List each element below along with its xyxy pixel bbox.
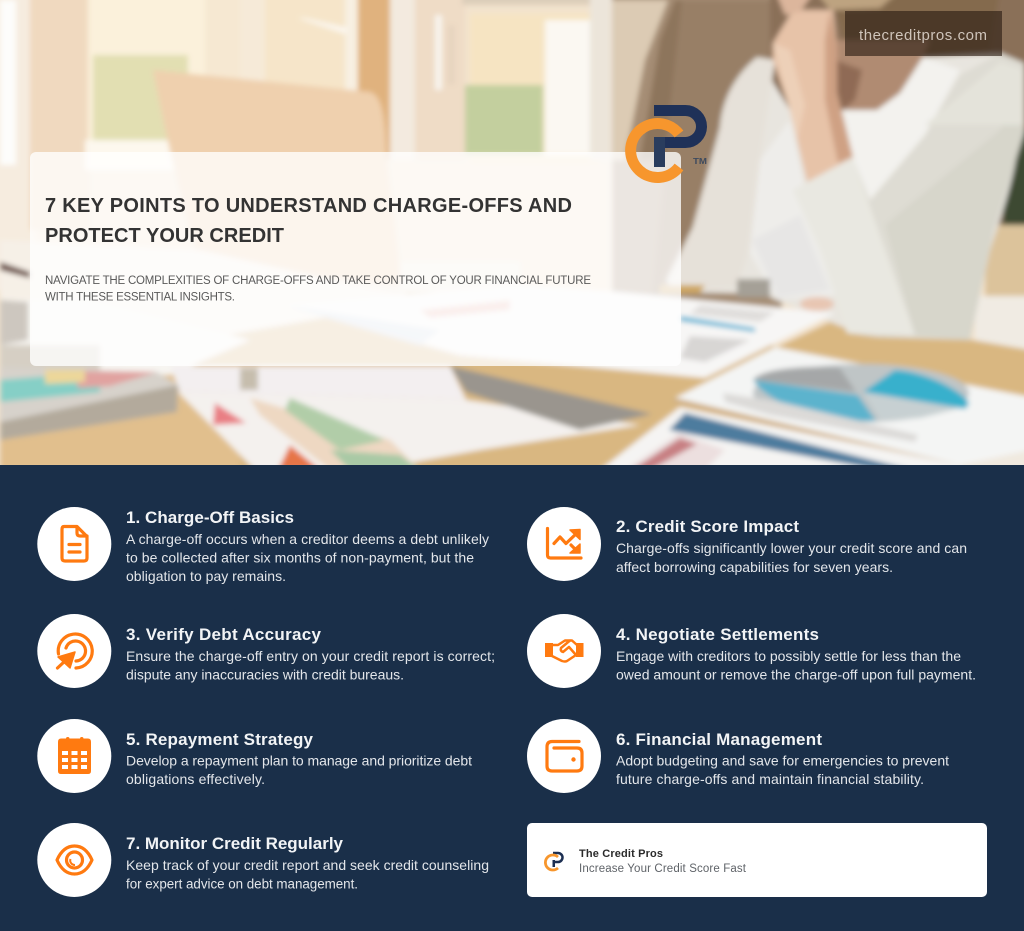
text: negotiate settlements: owed amount or remove the charge-off upon full payment.: [616, 666, 976, 682]
calculator: [0, 368, 177, 424]
text: charge-off basics: obligation to pay remains.: [126, 568, 286, 584]
text: verify debt accuracy: dispute any inaccuracies with credit bureaus.: [126, 666, 404, 682]
brand card: [527, 823, 987, 897]
item 1: charge-off basics: [37, 507, 489, 584]
text: credit score impact: [616, 517, 967, 575]
item 2: credit score impact: [527, 507, 967, 581]
paper stack: [178, 392, 640, 470]
item 3: verify debt accuracy: [37, 614, 495, 688]
icon: target with arrow: [37, 614, 111, 688]
text: repayment strategy: [126, 730, 472, 787]
right wall: [770, 0, 1024, 230]
text: charge-off basics: 1. Charge-Off Basics: [126, 508, 294, 527]
item 6: financial management: [527, 719, 949, 793]
text: repayment strategy: obligations effectively.: [126, 771, 265, 787]
item 7: monitor credit regularly: [37, 823, 489, 897]
card text: Increase Your Credit Score Fast: [579, 863, 747, 875]
item 5: repayment strategy: [37, 719, 472, 793]
title: 7 KEY POINTS TO UNDERSTAND CHARGE-OFFS AND: [45, 195, 572, 217]
subtitle: [45, 275, 591, 304]
text: monitor credit regularly: 7. Monitor Credit Regularly: [126, 834, 344, 853]
text: financial management: future charge-offs and maintain financial stability.: [616, 771, 924, 787]
title: PROTECT YOUR CREDIT: [45, 225, 284, 247]
text: negotiate settlements: Engage with creditors to possibly settle for less than the: [616, 648, 961, 664]
text: verify debt accuracy: 3. Verify Debt Accuracy: [126, 625, 322, 644]
card text: The Credit Pros: [579, 848, 663, 860]
icon: document: [37, 507, 111, 581]
icon: chart: [527, 507, 601, 581]
subtitle: NAVIGATE THE COMPLEXITIES OF CHARGE-OFFS AND TAKE CONTROL OF YOUR FINANCIAL FUTURE: [45, 275, 591, 287]
website badge: thecreditpros.com: [859, 27, 987, 44]
icon: wallet: [527, 719, 601, 793]
papers right bottom: [600, 407, 960, 470]
text: financial management: [616, 730, 949, 787]
woman: forearm and fist: [773, 10, 853, 182]
papers left: [2, 317, 248, 378]
website badge: [845, 11, 1002, 56]
papers centre: [285, 285, 835, 378]
hero photo: woman at desk with papers: [0, 0, 1024, 480]
title: [45, 195, 572, 247]
hair and neck: [838, 0, 996, 36]
text: verify debt accuracy: [126, 625, 495, 682]
icon: small CP logo: [545, 853, 562, 870]
left window: [0, 0, 30, 274]
text: charge-off basics: [126, 508, 489, 584]
text: financial management: 6. Financial Management: [616, 730, 822, 749]
pie chart paper: [675, 347, 1024, 470]
text: verify debt accuracy: Ensure the charge-off entry on your credit report is correct;: [126, 648, 495, 664]
text: charge-off basics: A charge-off occurs when a creditor deems a debt unlikely: [126, 531, 489, 547]
icon: eye: [37, 823, 111, 897]
text: negotiate settlements: 4. Negotiate Settlements: [616, 625, 819, 644]
curtain: [612, 0, 782, 310]
text: negotiate settlements: [616, 625, 976, 682]
icon: calendar: [37, 719, 111, 793]
logo: CP monogram: [631, 110, 707, 178]
text: monitor credit regularly: Keep track of your credit report and seek credit counseling: [126, 857, 489, 873]
text: monitor credit regularly: for expert advice on debt management.: [126, 876, 358, 892]
text: credit score impact: 2. Credit Score Impact: [616, 517, 799, 536]
text: credit score impact: affect borrowing capabilities for seven years.: [616, 559, 893, 575]
translucent heading panel: [30, 152, 681, 366]
text: financial management: Adopt budgeting and save for emergencies to prevent: [616, 752, 949, 768]
laptop: [154, 71, 388, 172]
navy content panel: [0, 465, 1024, 931]
text: repayment strategy: Develop a repayment plan to manage and prioritize debt: [126, 752, 472, 768]
card text: [579, 848, 747, 875]
table: [194, 318, 1024, 465]
text: monitor credit regularly: [126, 834, 489, 892]
subtitle: WITH THESE ESSENTIAL INSIGHTS.: [45, 292, 235, 304]
text: repayment strategy: 5. Repayment Strategy: [126, 730, 314, 749]
woman: shirt torso: [698, 50, 1019, 330]
text: charge-off basics: to be collected after six months of non-payment, but the: [126, 550, 474, 566]
item 4: negotiate settlements: [527, 614, 976, 688]
woman: right sleeve: [854, 56, 1022, 342]
icon: handshake: [527, 614, 601, 688]
logo: CP monogram: TM: [693, 157, 707, 166]
text: credit score impact: Charge-offs significantly lower your credit score and can: [616, 540, 967, 556]
